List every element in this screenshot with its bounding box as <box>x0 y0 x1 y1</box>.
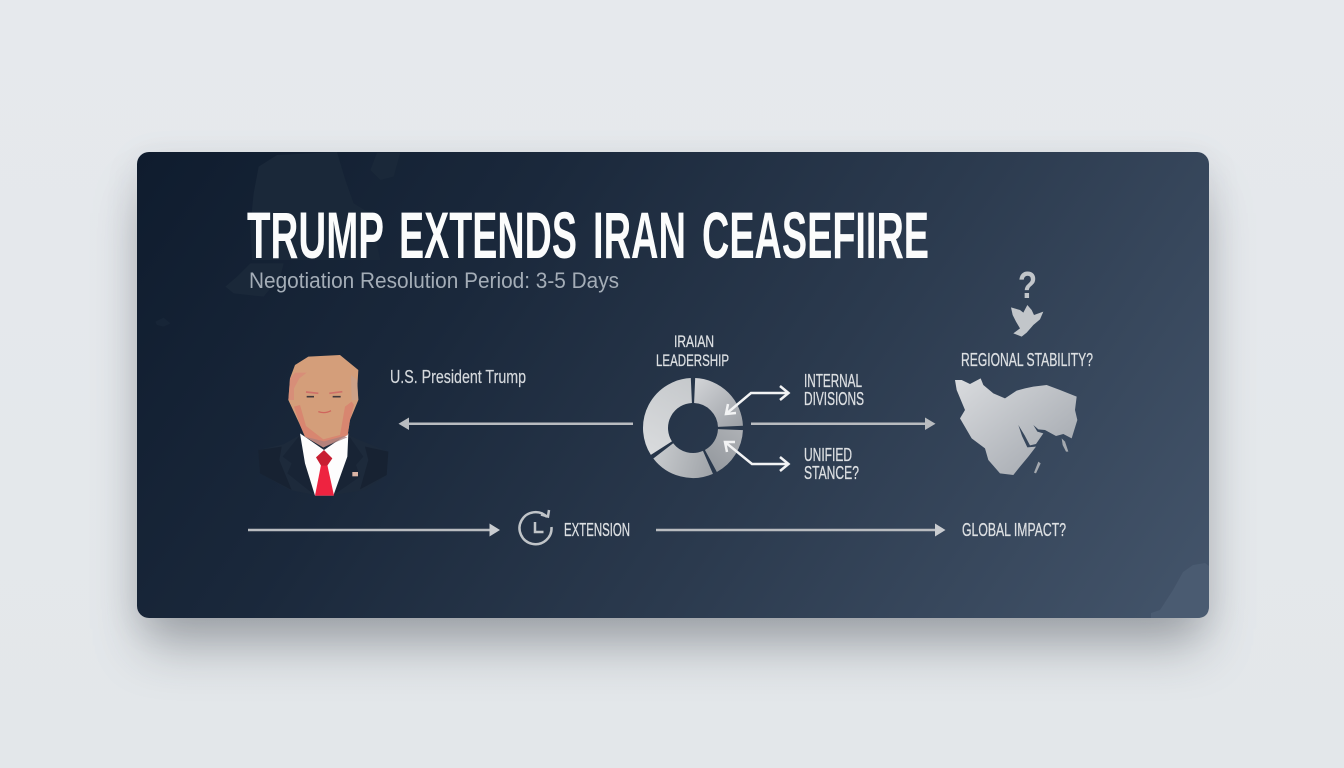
faint background map texture <box>155 152 400 327</box>
label: Internal Divisions <box>804 371 864 409</box>
icon: clock <box>520 510 552 544</box>
mouth <box>318 411 331 413</box>
title: EXTENDS <box>399 198 577 272</box>
panel: dark card <box>137 152 1209 618</box>
label: Regional Stability: REGIONAL STABILITY? <box>961 350 1093 370</box>
label: Unified Stance <box>804 445 859 483</box>
title: IRAN <box>593 198 686 272</box>
jacket <box>258 435 388 495</box>
icon: Trump portrait <box>258 355 388 496</box>
shirt <box>300 433 348 496</box>
arrow: leadership to Trump <box>398 418 633 430</box>
icon: question mark: ? <box>1018 265 1037 307</box>
tie <box>315 465 334 496</box>
label: Iraian Leadership <box>656 332 729 370</box>
title: TRUMP <box>247 198 384 272</box>
subtitle: Negotiation Resolution Period: 3-5 Days <box>249 268 619 293</box>
hair shadow <box>288 373 307 400</box>
arrow: internal divisions <box>726 386 788 414</box>
face and hair <box>288 355 358 447</box>
arrow: timeline start <box>248 524 500 536</box>
arrow: timeline end <box>656 524 946 536</box>
lighter corner texture <box>1151 563 1209 618</box>
label: Iraian Leadership: LEADERSHIP <box>656 351 729 370</box>
eyes <box>307 394 341 399</box>
label: U.S. President Trump: U.S. President Trump <box>390 367 526 387</box>
label: Extension: EXTENSION <box>564 520 630 540</box>
arrow: unified stance <box>725 442 788 471</box>
label: Unified Stance: UNIFIED <box>804 445 852 465</box>
label: Internal Divisions: INTERNAL <box>804 371 862 391</box>
lapel pin <box>352 472 358 476</box>
label: Internal Divisions: DIVISIONS <box>804 389 864 409</box>
title <box>247 198 929 272</box>
title: CEASEFIIRE <box>702 198 929 272</box>
chart: leadership donut <box>656 391 730 465</box>
brows <box>306 392 342 393</box>
label: Iraian Leadership: IRAIAN <box>674 332 714 351</box>
label: Global Impact: GLOBAL IMPACT? <box>962 520 1066 540</box>
jaw shading <box>294 402 354 447</box>
icon: dove <box>1011 305 1043 337</box>
icon: regional map <box>955 378 1077 475</box>
arrow: leadership to region <box>751 418 936 430</box>
label: Unified Stance: STANCE? <box>804 463 859 483</box>
